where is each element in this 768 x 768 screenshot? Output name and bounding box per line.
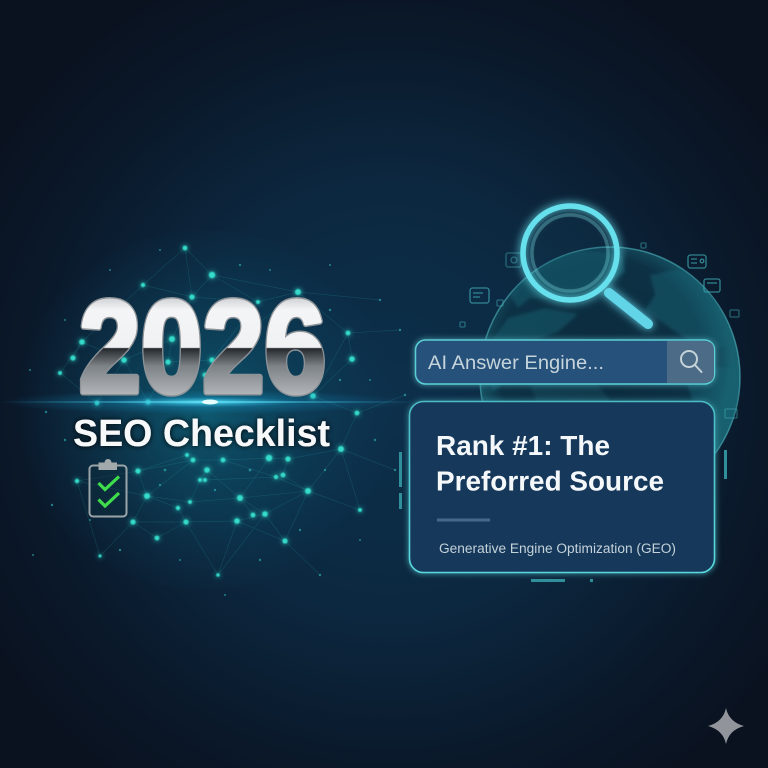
card heading: Rank #1: The [436, 430, 610, 461]
icon: sparkle watermark [708, 708, 744, 744]
search text: AI Answer Engine... [428, 352, 604, 374]
card subtitle: Generative Engine Optimization (GEO) [439, 541, 676, 556]
icon: data tile top right [688, 255, 706, 268]
card heading: Preforred Source [436, 466, 664, 496]
globe landmasses [485, 251, 742, 425]
globe [480, 246, 741, 454]
icon: clipboard with checks [90, 459, 126, 516]
interface accent bars [399, 450, 727, 582]
light flare [0, 390, 420, 414]
icon: data tile right [704, 279, 720, 292]
floating data icons [460, 243, 739, 418]
heading: SEO Checklist: SEO Checklist [73, 413, 330, 455]
network nodes [58, 246, 362, 577]
search button [667, 341, 714, 383]
icon: data tile top left [506, 253, 521, 267]
icon: magnifying glass [523, 206, 648, 324]
network lines [60, 248, 405, 575]
card: rank [410, 402, 714, 572]
card heading [436, 430, 664, 496]
icon: small squares [460, 243, 739, 418]
title: 2026: 2026 [79, 273, 326, 420]
card divider [437, 518, 490, 522]
network cluster [15, 230, 406, 596]
icon: search [681, 351, 702, 372]
icon: data tile left [470, 288, 489, 303]
small dust particles [29, 249, 406, 596]
title: 2026: 2026 [79, 273, 326, 420]
search bar [416, 340, 714, 384]
